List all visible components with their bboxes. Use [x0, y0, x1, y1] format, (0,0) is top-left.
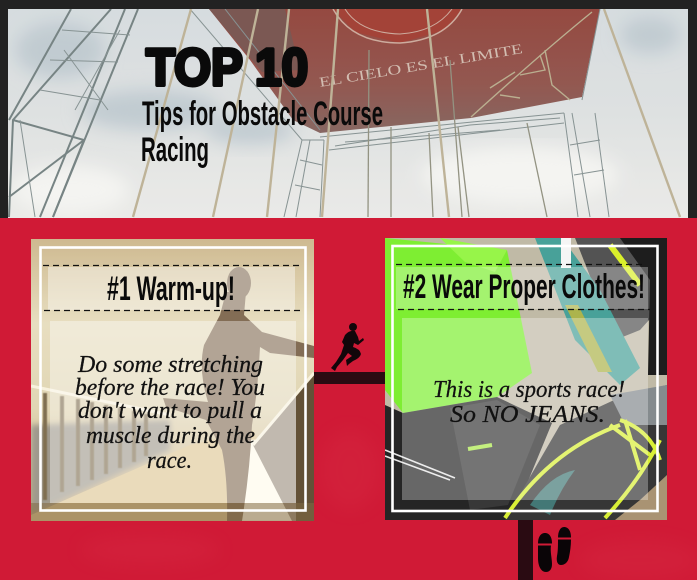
translucent boxes — [396, 267, 648, 309]
water behind railing — [31, 420, 170, 515]
truss — [9, 9, 138, 217]
right wall — [253, 396, 296, 521]
silhouette — [163, 267, 314, 521]
heading: tip 1: #1 Warm-up! — [107, 270, 235, 308]
bridge floor — [31, 430, 257, 521]
title: TOP 10 — [146, 39, 308, 97]
text: tip 2 body: So NO JEANS. — [450, 402, 605, 428]
white frame — [392, 246, 658, 511]
text: tip 1 body — [75, 352, 265, 474]
photo: neon clothes and shoes — [385, 238, 667, 520]
left railing — [45, 393, 146, 500]
icon: footprints — [538, 527, 571, 572]
teal shoe — [535, 238, 640, 385]
neon shirt — [385, 238, 532, 413]
text: tip 2 body: This is a sports race! — [433, 377, 625, 403]
panel: tip 2 clothes — [385, 238, 667, 520]
text: tip 1 body: race. — [147, 448, 192, 474]
white strap — [561, 238, 571, 268]
dark frame behind header — [0, 0, 697, 218]
translucent boxes — [48, 267, 295, 310]
banner slogan: EL CIELO ES EL LIMITE — [318, 42, 524, 91]
text: tip 2 body — [433, 377, 625, 428]
white frame — [40, 248, 306, 510]
photo: runner stretching on a bridge — [31, 239, 314, 521]
dark top right — [575, 238, 650, 336]
icon: runner — [331, 323, 364, 371]
subtitle: Tips for Obstacle Course — [142, 95, 383, 133]
header photo: obstacle rig against sky — [8, 9, 688, 218]
text: tip 1 body: Do some stretching — [77, 352, 263, 378]
text: tip 1 body: muscle during the — [86, 423, 255, 449]
branches — [471, 12, 592, 117]
ropes — [133, 9, 680, 217]
subtitle: Racing — [141, 131, 209, 169]
grey shoe — [505, 385, 667, 520]
banner — [209, 9, 600, 133]
heading rules — [396, 264, 650, 310]
text: tip 1 body: don't want to pull a — [78, 398, 262, 424]
connector between tips — [314, 372, 385, 384]
subtitle — [141, 95, 383, 169]
panel: tip 1 warm-up — [31, 239, 314, 521]
connector down — [518, 520, 533, 580]
heading rules — [43, 266, 302, 310]
dark pants — [385, 397, 552, 520]
text: tip 1 body: before the race! You — [75, 375, 265, 401]
